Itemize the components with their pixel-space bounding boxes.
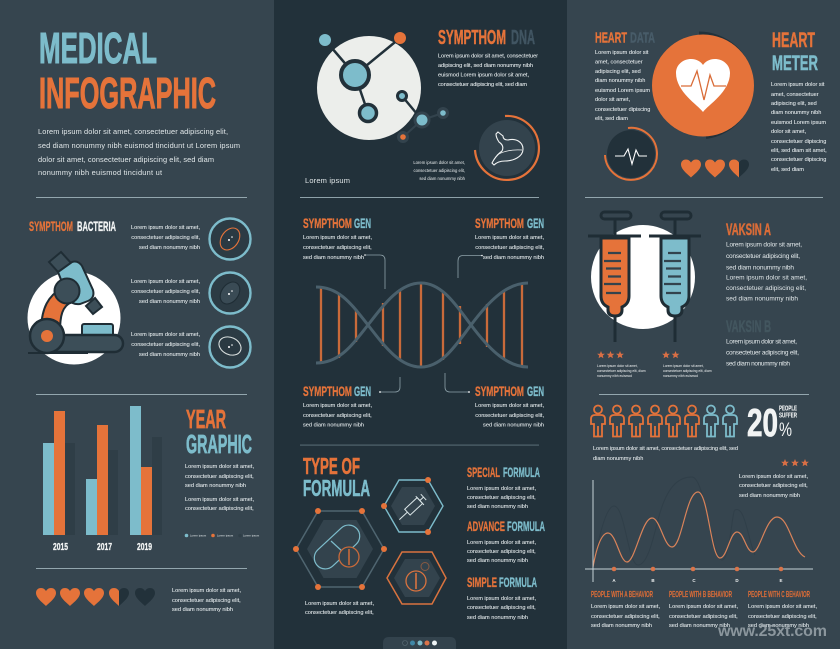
chart legend: Lorem ipsum bbox=[243, 534, 260, 538]
behavior a: sed diam nonummy nibh bbox=[591, 623, 652, 629]
icon: stomach bbox=[475, 116, 539, 180]
stat: 20 percent: 20 bbox=[747, 402, 778, 445]
behavior a bbox=[591, 589, 660, 629]
heart rating text: sed diam nonummy nibh bbox=[172, 607, 233, 613]
year graphic text: consectetuer adipiscing elit, bbox=[185, 506, 254, 512]
vaccine b small text: Lorem ipsum dolor sit amet, bbox=[663, 364, 704, 368]
icon: bacteria orange bbox=[210, 218, 250, 260]
stat: 20 percent: SUFFER bbox=[779, 412, 797, 420]
vaksin a text bbox=[726, 242, 807, 302]
dna text: consectetuer adipiscing elit, sed diam bbox=[438, 82, 527, 88]
people text: diam nonummy nibh bbox=[593, 456, 643, 462]
icon: bacteria dark bbox=[210, 272, 250, 314]
behavior a: Lorem ipsum dolor sit amet, bbox=[591, 604, 660, 610]
bar chart bbox=[43, 406, 162, 553]
dna text: Lorem ipsum dolor sit amet, consectetuer bbox=[438, 54, 538, 60]
icon: molecule bbox=[317, 32, 449, 143]
year graphic text: sed diam nonummy nibh bbox=[185, 483, 246, 489]
vaksin b text bbox=[726, 338, 799, 368]
chart axis labels: E bbox=[779, 578, 783, 583]
heart data text: dolor sit amet, bbox=[595, 97, 631, 103]
heading: gen top left: SYMPTHOM bbox=[303, 216, 352, 231]
text: gen top left: consectetuer adipiscing elit, bbox=[303, 245, 372, 251]
intro text bbox=[38, 127, 240, 177]
behavior b: PEOPLE WITH B BEHAVIOR bbox=[669, 589, 732, 599]
heading: simple formula: FORMULA bbox=[499, 574, 537, 590]
heart rating right bbox=[681, 160, 749, 178]
text: gen bottom left: Lorem ipsum dolor sit amet, bbox=[303, 403, 372, 409]
vaccine b small text: consectetuer adipiscing elit, diam bbox=[663, 369, 712, 373]
chart axis labels: C bbox=[692, 578, 696, 583]
heading: type of formula: TYPE OF bbox=[303, 453, 360, 479]
text: simple formula: sed diam nonummy nibh bbox=[467, 615, 528, 621]
heart data text: consectetuer dipiscing bbox=[595, 107, 650, 113]
hexagon: pill bbox=[293, 508, 387, 590]
heading: gen bottom right: GEN bbox=[527, 384, 544, 399]
panel: right background bbox=[567, 0, 840, 649]
heart meter text: Lorem ipsum dolor sit bbox=[771, 82, 825, 88]
chart rating text: Lorem ipsum dolor sit amet, bbox=[739, 474, 808, 480]
stars: vaccine b rating bbox=[662, 351, 679, 358]
heading: simple formula: SIMPLE bbox=[467, 574, 497, 590]
heading: heart meter bbox=[772, 29, 818, 75]
bacteria text 3 bbox=[131, 332, 200, 358]
text: special formula: sed diam nonummy nibh bbox=[467, 504, 528, 510]
heading: symptom dna: SYMPTHOM bbox=[438, 27, 506, 49]
vaccine a small text: consectetuer adipiscing elit, diam bbox=[597, 369, 646, 373]
heart meter text: consectetuer dipiscing bbox=[771, 139, 826, 145]
text: gen top right: consectetuer adipiscing elit, bbox=[475, 245, 544, 251]
heart meter text: dolor sit amet, bbox=[771, 129, 807, 135]
vaccine b small text bbox=[663, 364, 712, 378]
bar chart year labels: 2015 bbox=[53, 542, 68, 553]
heart rating text bbox=[172, 588, 241, 613]
vaksin a text: Lorem ipsum dolor sit amet, bbox=[726, 242, 802, 248]
arrow: bottom left connector bbox=[379, 377, 400, 393]
heart meter text: euismod Lorem ipsum bbox=[771, 120, 826, 126]
heading: special formula: SPECIAL bbox=[467, 465, 500, 480]
text: gen top right: Lorem ipsum dolor sit amet, bbox=[475, 235, 544, 241]
heading: year graphic: YEAR bbox=[186, 404, 226, 434]
formula caption bbox=[305, 601, 374, 616]
stars: chart rating bbox=[781, 459, 809, 466]
bacteria text 1: Lorem ipsum dolor sit amet, bbox=[131, 225, 200, 231]
vaksin a text: consectetuer adipiscing elit, bbox=[726, 285, 806, 292]
heading: gen bottom right: SYMPTHOM bbox=[475, 384, 524, 399]
chart legend bbox=[185, 534, 260, 538]
behavior c bbox=[748, 589, 817, 629]
heading: symptom dna: DNA bbox=[511, 27, 535, 49]
behavior b bbox=[669, 589, 738, 629]
behavior b: sed diam nonummy nibh bbox=[669, 623, 730, 629]
intro text: sed diam nonummy nibh euismod tincidunt ut Lorem ipsum bbox=[38, 141, 240, 150]
panel: middle background bbox=[274, 0, 567, 649]
text: simple formula bbox=[467, 596, 536, 621]
people pictogram bbox=[591, 406, 737, 436]
vaccine a small text bbox=[597, 364, 646, 378]
heart data text: adipiscing elit, sed bbox=[595, 69, 641, 75]
chart rating text: consectetuer adipiscing elit, bbox=[739, 483, 808, 489]
heart meter text: consectetuer dipiscing bbox=[771, 157, 826, 163]
bacteria text 2: consectetuer adipiscing elit, bbox=[131, 289, 200, 295]
text: advance formula bbox=[467, 540, 536, 564]
bar chart year labels: 2017 bbox=[97, 542, 112, 553]
pager bbox=[383, 637, 456, 649]
icon: bacteria light bbox=[210, 326, 250, 368]
heading: year graphic: GRAPHIC bbox=[186, 429, 252, 459]
text: gen bottom left: consectetuer adipiscing elit, bbox=[303, 413, 372, 419]
heading: heart data: DATA bbox=[630, 30, 655, 46]
heart meter text: amet, consectetuer bbox=[771, 92, 819, 98]
formula caption: consectetuer adipiscing elit, bbox=[305, 610, 374, 616]
people text bbox=[593, 446, 738, 462]
heading: advance formula: ADVANCE bbox=[467, 518, 505, 534]
text: gen bottom left: sed diam nonummy nibh bbox=[303, 422, 364, 428]
bacteria text 3: sed diam nonummy nibh bbox=[139, 352, 200, 358]
heart meter text: elit, sed diam bbox=[771, 167, 804, 173]
bar chart year labels: 2019 bbox=[137, 542, 152, 553]
text: gen top left: sed diam nonummy nibh bbox=[303, 255, 364, 261]
heading: type of formula: FORMULA bbox=[303, 475, 370, 501]
heading: type of formula bbox=[303, 453, 370, 501]
text: advance formula: Lorem ipsum dolor sit amet, bbox=[467, 540, 536, 546]
dna text: euismod Lorem ipsum dolor sit amet, bbox=[438, 72, 529, 78]
hexagon: tablet bbox=[387, 552, 446, 604]
heart meter text bbox=[771, 82, 827, 173]
stars: vaccine a rating bbox=[597, 351, 624, 358]
bacteria text 3: consectetuer adipiscing elit, bbox=[131, 342, 200, 348]
stomach text: sed diam nonummy nibh bbox=[419, 176, 466, 181]
people text: Lorem ipsum dolor sit amet, consectetuer adipiscing elit, sed bbox=[593, 446, 738, 452]
stomach text: Lorem ipsum dolor sit amet, bbox=[413, 160, 465, 165]
intro text: Lorem ipsum dolor sit amet, consectetuer adipiscing elit, bbox=[38, 127, 228, 136]
heading: gen bottom left: GEN bbox=[354, 384, 371, 399]
chart axis labels: A bbox=[612, 578, 616, 583]
heading: gen top right: GEN bbox=[527, 216, 544, 231]
chart rating text: sed diam nonummy nibh bbox=[739, 493, 800, 499]
formula caption: Lorem ipsum dolor sit amet, bbox=[305, 601, 374, 607]
line chart bbox=[585, 477, 813, 583]
year graphic text bbox=[185, 464, 254, 512]
behavior c: Lorem ipsum dolor sit amet, bbox=[748, 604, 817, 610]
title: INFOGRAPHIC bbox=[39, 69, 216, 118]
arrow: bottom right connector bbox=[445, 373, 470, 393]
text: gen top right: sed diam nonummy nibh bbox=[483, 255, 544, 261]
text: gen bottom right: Lorem ipsum dolor sit amet, bbox=[475, 403, 544, 409]
heart rating text: Lorem ipsum dolor sit amet, bbox=[172, 588, 241, 594]
text: special formula: consectetuer adipiscing elit, bbox=[467, 495, 536, 501]
heading: gen top left: GEN bbox=[354, 216, 371, 231]
behavior a: consectetuer adipiscing elit, bbox=[591, 614, 660, 620]
heading: year graphic bbox=[186, 404, 252, 459]
dna text bbox=[438, 54, 538, 88]
chart axis labels: D bbox=[735, 578, 739, 583]
year graphic text: Lorem ipsum dolor sit amet, bbox=[185, 497, 254, 503]
caption: Lorem ipsum bbox=[305, 176, 350, 185]
stat: 20 percent: % bbox=[779, 420, 792, 441]
heart data text: diam nonummy nibh bbox=[595, 78, 645, 84]
icon: pulse dial bbox=[605, 128, 657, 180]
icon: microscope bbox=[28, 252, 123, 364]
heart data text: elit, sed diam bbox=[595, 116, 628, 122]
heading: special formula: FORMULA bbox=[503, 465, 540, 480]
heading: gen top right: SYMPTHOM bbox=[475, 216, 524, 231]
intro text: dolor sit amet, consectetuer adipiscing elit, sed diam bbox=[38, 155, 214, 164]
text: gen bottom left bbox=[303, 403, 372, 428]
bacteria text 2 bbox=[131, 279, 200, 305]
vaksin b text: consectetuer adipiscing elit, bbox=[726, 350, 799, 356]
heading: gen bottom left: SYMPTHOM bbox=[303, 384, 352, 399]
icon: syringes bbox=[588, 212, 701, 342]
icon: heart meter dial bbox=[652, 34, 754, 137]
heading: symptom bacteria: SYMPTHOM bbox=[29, 218, 73, 234]
text: gen top left: Lorem ipsum dolor sit amet, bbox=[303, 235, 372, 241]
heart data text: amet, consectetuer bbox=[595, 60, 643, 66]
heart rating text: consectetuer adipiscing elit, bbox=[172, 598, 241, 604]
heading: symptom bacteria: BACTERIA bbox=[77, 218, 116, 234]
heading: vaksin a: VAKSIN A bbox=[726, 220, 771, 239]
year graphic text: Lorem ipsum dolor sit amet, bbox=[185, 464, 254, 470]
text: gen top left bbox=[303, 235, 372, 261]
chart axis labels bbox=[612, 578, 783, 583]
title: MEDICAL bbox=[39, 24, 157, 73]
bacteria text 1 bbox=[131, 225, 200, 251]
vaksin a text: sed diam nonummy nibh bbox=[726, 296, 798, 302]
vaksin b text: sed diam nonummy nibh bbox=[726, 360, 790, 368]
bacteria text 2: sed diam nonummy nibh bbox=[139, 299, 200, 305]
chart axis labels: B bbox=[651, 578, 655, 583]
heading: advance formula: FORMULA bbox=[507, 518, 545, 534]
arrow: top right connector bbox=[458, 255, 483, 278]
chart rating text bbox=[739, 474, 808, 499]
text: advance formula: consectetuer adipiscing elit, bbox=[467, 549, 536, 555]
vaccine a small text: Lorem ipsum dolor sit amet, bbox=[597, 364, 638, 368]
vaksin b text: Lorem ipsum dolor sit amet, bbox=[726, 338, 797, 346]
text: gen top right bbox=[475, 235, 544, 261]
heart meter text: elit, sed diam sit amet, bbox=[771, 148, 827, 154]
vaksin a text: consectetuer adipiscing elit, bbox=[726, 253, 800, 260]
watermark: www.25xt.com bbox=[717, 623, 827, 640]
hexagon: syringe bbox=[381, 477, 443, 535]
dna text: adipiscing elit, sed diam nonummy nibh bbox=[438, 63, 533, 69]
stomach text bbox=[413, 160, 466, 181]
text: special formula: Lorem ipsum dolor sit amet, bbox=[467, 486, 536, 492]
bar chart year labels bbox=[53, 542, 152, 553]
title bbox=[39, 24, 216, 118]
text: gen bottom right: consectetuer adipiscing elit, bbox=[475, 413, 544, 419]
heart meter text: diam nonummy nibh bbox=[771, 110, 821, 116]
text: special formula bbox=[467, 486, 536, 510]
vaksin a text: sed diam nonummy nibh bbox=[726, 264, 794, 272]
stat: 20 percent: PEOPLE bbox=[779, 406, 797, 412]
text: gen bottom right bbox=[475, 403, 544, 428]
heart rating left bbox=[36, 588, 155, 606]
stomach text: consectetuer adipiscing elit, bbox=[414, 168, 465, 173]
year graphic text: consectetuer adipiscing elit, bbox=[185, 474, 254, 480]
bacteria text 3: Lorem ipsum dolor sit amet, bbox=[131, 332, 200, 338]
heart data text: Lorem ipsum dolor sit bbox=[595, 50, 649, 56]
bacteria text 1: consectetuer adipiscing elit, bbox=[131, 235, 200, 241]
intro text: nonummy nibh euismod tincidunt ut bbox=[38, 168, 162, 177]
behavior c: sed diam nonummy nibh bbox=[748, 623, 809, 629]
vaccine b small text: nonummy nibh euismod bbox=[663, 374, 698, 378]
behavior c: consectetuer adipiscing elit, bbox=[748, 614, 817, 620]
heading: vaksin b: VAKSIN B bbox=[726, 317, 771, 336]
bacteria text 1: sed diam nonummy nibh bbox=[139, 245, 200, 251]
chart legend: Lorem ipsum bbox=[217, 534, 234, 538]
chart legend: Lorem ipsum bbox=[190, 534, 207, 538]
behavior b: Lorem ipsum dolor sit amet, bbox=[669, 604, 738, 610]
bacteria text 2: Lorem ipsum dolor sit amet, bbox=[131, 279, 200, 285]
behavior a: PEOPLE WITH A BEHAVIOR bbox=[591, 589, 653, 599]
arrow: top left connector bbox=[364, 254, 385, 289]
vaccine a small text: nonummy nibh euismod bbox=[597, 374, 632, 378]
text: gen bottom right: sed diam nonummy nibh bbox=[483, 422, 544, 428]
heart data text bbox=[595, 50, 650, 122]
panel: left background bbox=[0, 0, 274, 649]
text: simple formula: Lorem ipsum dolor sit amet, bbox=[467, 596, 536, 602]
text: advance formula: sed diam nonummy nibh bbox=[467, 558, 528, 564]
heart meter text: adipiscing elit, sed bbox=[771, 101, 817, 107]
text: simple formula: consectetuer adipiscing elit, bbox=[467, 605, 536, 611]
heart data text: euismod Lorem ipsum bbox=[595, 88, 650, 94]
vaksin a text: Lorem ipsum dolor sit amet, bbox=[726, 274, 807, 282]
behavior b: consectetuer adipiscing elit, bbox=[669, 614, 738, 620]
heading: heart data: HEART bbox=[595, 30, 627, 46]
dna helix bbox=[316, 283, 528, 367]
